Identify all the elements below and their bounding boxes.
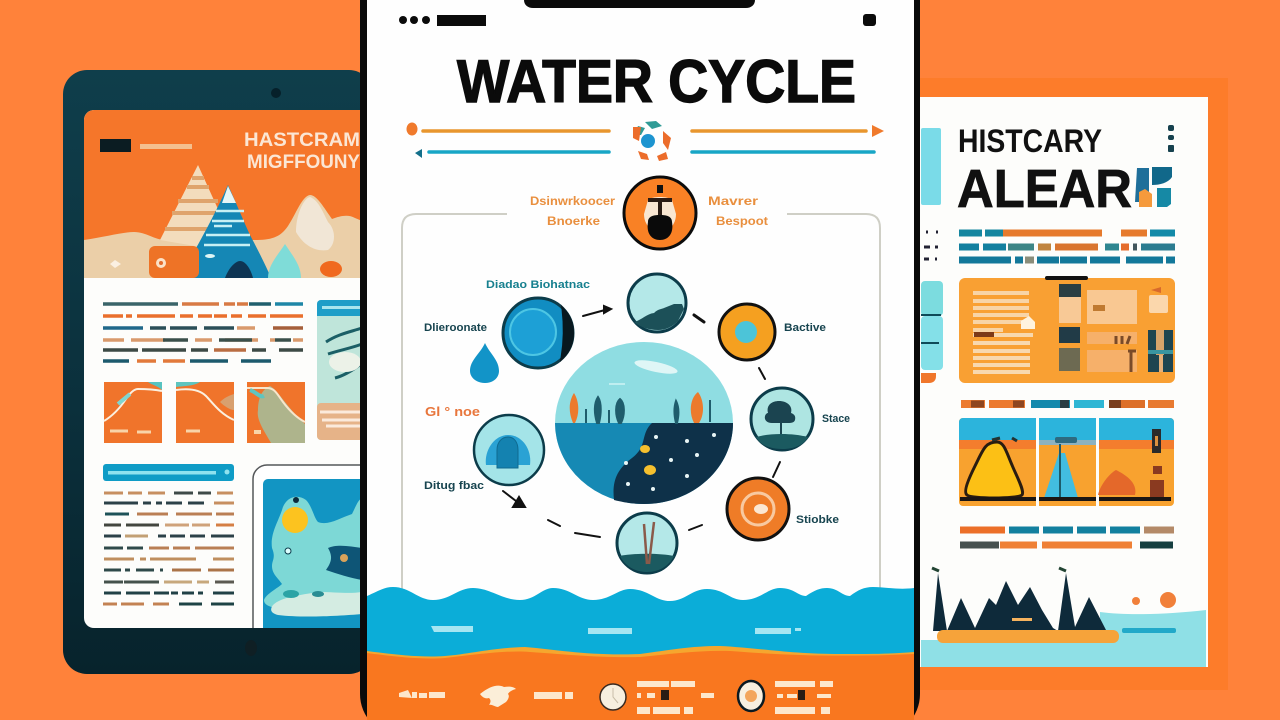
node labels: Dlieroonate [424,322,487,334]
panel: tablet blue header bar [103,464,234,481]
phone notch [524,0,755,8]
node: tree circle [751,388,813,450]
icon: menu dots [1168,125,1174,152]
node: top circle [628,274,686,332]
chart: mountain silhouette scene [921,568,1206,667]
icon: striped mountain [160,165,232,246]
node labels: Bactive [784,322,826,334]
divider lines with arrows [406,122,884,158]
text block: tablet paragraph [103,304,303,361]
chart: water cycle diagram [424,274,850,573]
heading: right page title: ALEAR [957,159,1132,219]
icon: tablet home button [245,640,257,656]
icon: dark ring circle [738,681,764,711]
node: cave circle [474,415,544,485]
node: big blue circle [503,298,573,368]
tablet heading text: MIGFFOUNY [247,152,360,173]
callout: top orange labels: Mavrer [708,194,758,208]
panel: left teal strip [921,128,943,383]
globe [555,342,733,504]
panel border [402,214,880,590]
footer items [399,681,833,714]
icon: tablet camera [271,88,281,98]
panel: right page orange dashboard [959,276,1175,383]
icon: water drop [470,343,499,383]
icon: blue cone mountain [191,185,271,278]
callout: top orange labels: Bnoerke [547,214,600,228]
chart: tablet thumbnail 3 [247,382,305,443]
text block: right page bars [959,233,1175,260]
node: orange circle with teal core [719,304,775,360]
panel: tablet mini map device [252,464,360,628]
panel: tablet side card [317,300,367,440]
heading: right page title [957,123,1132,219]
panel: tablet device [63,70,383,674]
icon: compass circle [600,684,626,710]
panel: central phone [360,0,920,720]
tablet heading text [244,130,360,173]
heading: right page title: HISTCARY [958,123,1102,159]
text block: tablet lower paragraph [103,493,234,604]
node labels: Ditug fbac [424,480,484,492]
icon: coloured blocks [1135,167,1172,207]
icon: top orange circle [624,177,696,249]
text block: right page lower bars [960,530,1174,545]
node: bottom circle [617,513,677,573]
icon: leaf [480,686,516,707]
panel: tablet header illustration [84,110,374,278]
text block: right page mid bars [961,400,1174,408]
node labels: Gl ° noe [425,404,480,419]
phone status bar [399,14,876,26]
node labels [424,279,850,526]
node labels: Diadao Biohatnac [486,279,590,291]
icon: central cycle emblem [633,121,671,161]
node labels: Stiobke [796,514,839,526]
footer: wave band [367,587,914,720]
callout: top orange labels [530,194,768,228]
callout: top orange labels: Bespoot [716,214,768,228]
tablet screen [84,110,374,628]
callout: top orange labels: Dsinwrkoocer [530,194,615,208]
chart: tablet thumbnail 1 [104,382,162,443]
node labels: Stace [822,413,850,425]
ground and right mountain [84,195,374,278]
chart: tablet thumbnail 2 [176,382,234,443]
title: WATER CYCLE [457,48,856,115]
arrows [503,306,780,537]
icon: orange block [149,246,199,278]
panel: right page [920,97,1208,667]
node: orange swirl circle [727,478,789,540]
tablet heading text: HASTCRAM [244,130,360,151]
chart: right page illustrated panel [959,418,1174,506]
